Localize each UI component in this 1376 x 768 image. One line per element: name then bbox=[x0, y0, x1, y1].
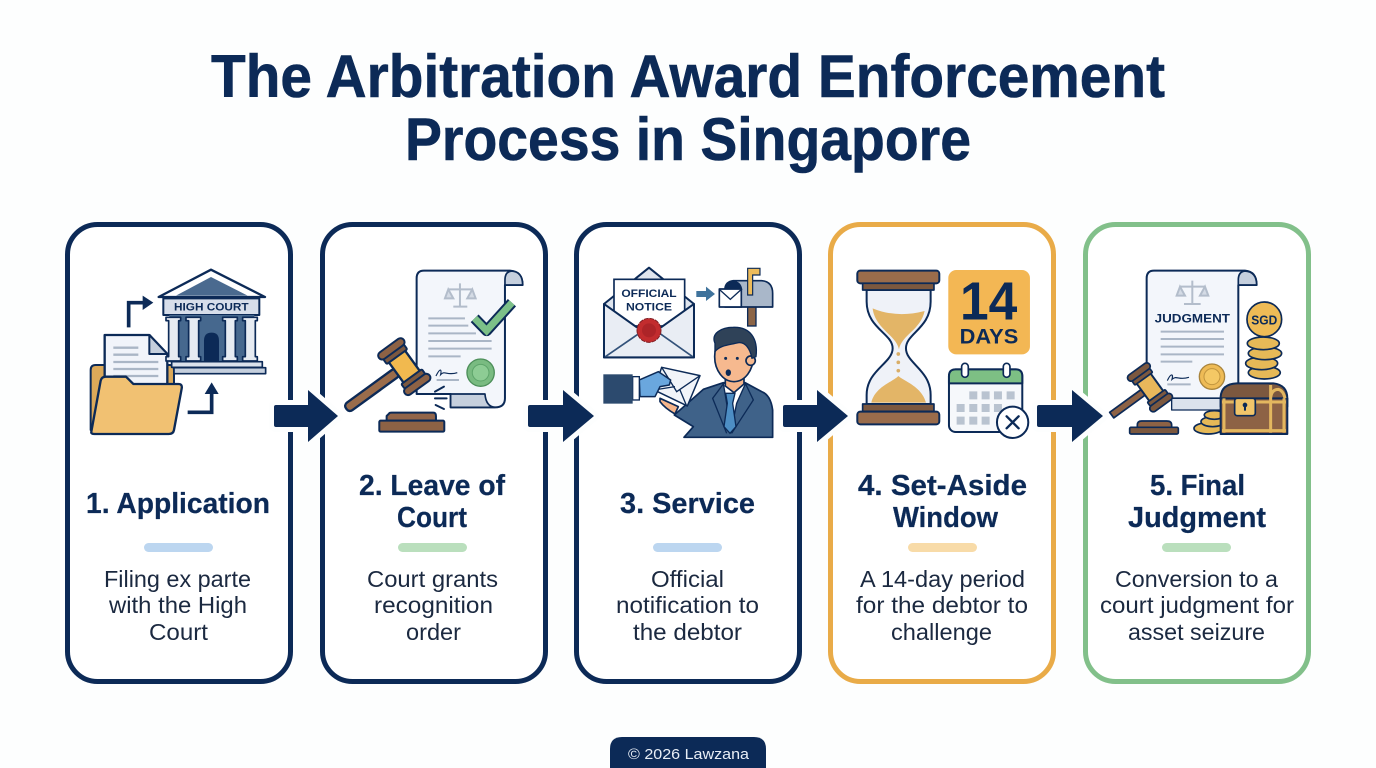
description: recognition bbox=[374, 592, 493, 618]
panel: step 3 service bbox=[576, 224, 800, 682]
arrow: step 1 to 2 bbox=[274, 390, 338, 442]
description bbox=[1100, 566, 1294, 645]
heading: Window bbox=[893, 502, 998, 534]
icon: judgment, gavel, coins and chest: SGD bbox=[1251, 313, 1277, 327]
panel: step 2 leave of court bbox=[322, 224, 546, 682]
description: Conversion to a bbox=[1115, 566, 1278, 592]
heading: 5. Final bbox=[1150, 470, 1245, 502]
icon: official notice and process server: OFFICIAL bbox=[621, 288, 677, 300]
description: notification to bbox=[616, 592, 759, 618]
accent bar bbox=[653, 543, 722, 552]
description: Court grants bbox=[367, 566, 498, 592]
description: order bbox=[406, 619, 461, 645]
title: Process in Singapore bbox=[405, 106, 971, 173]
heading: 2. Leave of bbox=[359, 470, 505, 502]
panel: step 1 application bbox=[68, 224, 290, 682]
icon: folder and high court bbox=[91, 270, 266, 434]
description: for the debtor to bbox=[856, 592, 1028, 618]
description: Court bbox=[149, 619, 209, 645]
description: challenge bbox=[891, 619, 992, 645]
icon: official notice and process server: NOTICE bbox=[626, 301, 672, 313]
icon: hourglass, 14 days and calendar: DAYS bbox=[960, 323, 1018, 348]
icon: judgment, gavel, coins and chest bbox=[1099, 271, 1287, 434]
icon: gavel and recognition order bbox=[331, 271, 523, 432]
panel: step 4 set-aside window bbox=[830, 224, 1054, 682]
heading: 4. Set-Aside bbox=[858, 470, 1027, 502]
footer: copyright badge bbox=[610, 737, 766, 768]
footer: copyright badge: © 2026 Lawzana bbox=[628, 746, 750, 763]
arrow: step 3 to 4 bbox=[783, 390, 848, 442]
description: A 14-day period bbox=[860, 566, 1025, 592]
icon: hourglass, 14 days and calendar: 14 bbox=[960, 271, 1017, 331]
description: Official bbox=[651, 566, 724, 592]
icon: hourglass, 14 days and calendar bbox=[857, 270, 1030, 438]
accent bar bbox=[908, 543, 977, 552]
description: asset seizure bbox=[1128, 619, 1265, 645]
arrow: step 2 to 3 bbox=[528, 390, 594, 442]
heading bbox=[359, 470, 505, 534]
arrow: step 4 to 5 bbox=[1037, 390, 1103, 442]
accent bar bbox=[1162, 543, 1231, 552]
icon: official notice and process server bbox=[603, 268, 773, 437]
description: court judgment for bbox=[1100, 592, 1294, 618]
description bbox=[856, 566, 1028, 645]
description: Filing ex parte bbox=[104, 566, 251, 592]
heading bbox=[858, 470, 1027, 534]
heading bbox=[1128, 470, 1266, 534]
icon: folder and high court: HIGH COURT bbox=[174, 301, 249, 313]
icon: judgment, gavel, coins and chest: JUDGMENT bbox=[1155, 311, 1230, 325]
accent bar bbox=[144, 543, 213, 552]
heading: 1. Application bbox=[86, 488, 270, 520]
title: The Arbitration Award Enforcement bbox=[211, 43, 1165, 110]
heading: Court bbox=[397, 502, 467, 534]
title bbox=[211, 43, 1165, 173]
description: with the High bbox=[108, 592, 247, 618]
description bbox=[367, 566, 498, 645]
description: the debtor bbox=[633, 619, 742, 645]
heading: 3. Service bbox=[620, 488, 755, 520]
heading: Judgment bbox=[1128, 502, 1266, 534]
accent bar bbox=[398, 543, 467, 552]
description bbox=[616, 566, 759, 645]
description bbox=[104, 566, 251, 645]
panel: step 5 final judgment bbox=[1086, 224, 1308, 682]
